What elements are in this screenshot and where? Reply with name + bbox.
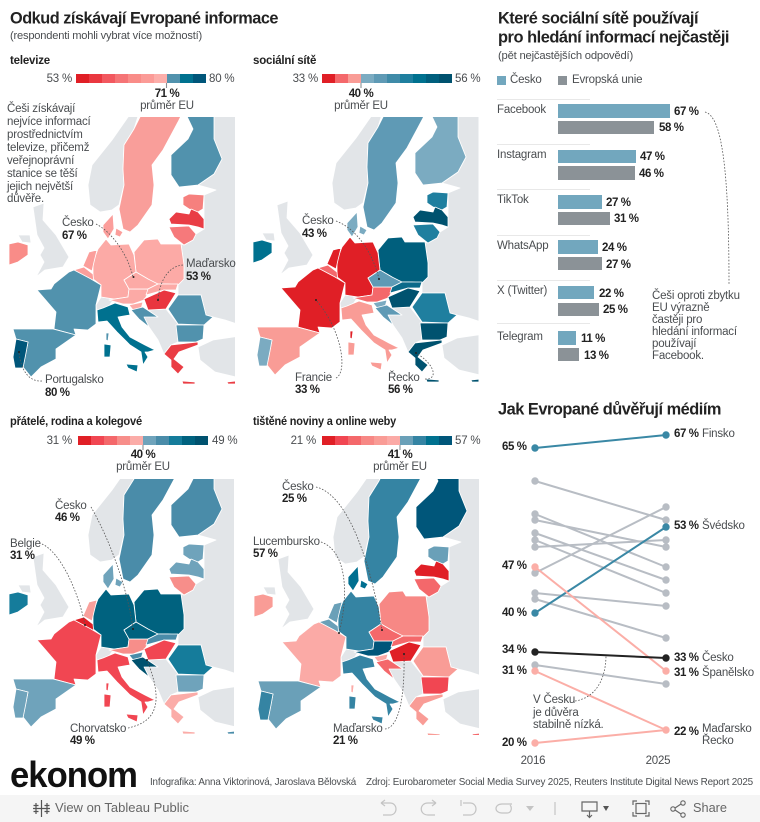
slope line: Maďarsko: 31 % xyxy=(502,665,527,677)
callout: Lucembursko print: 57 % xyxy=(253,548,278,560)
legend: bars: Česko xyxy=(510,73,542,86)
text block: TV note: jejich největší xyxy=(6,181,74,193)
callout: stable trust note: stabilně nízká. xyxy=(533,719,604,731)
callout: Česko friends: 46 % xyxy=(55,512,80,524)
callout: Facebook note xyxy=(652,112,740,362)
bars: Telegram: 13 % xyxy=(584,350,609,362)
callout: Maďarsko TV: 53 % xyxy=(186,271,211,283)
legend: television scale: průměr EU xyxy=(140,100,194,112)
credits: authors: Infografika: Anna Viktorinová, Jaroslava Bělovská xyxy=(150,776,356,788)
legend: social scale: 40 % xyxy=(349,88,373,100)
panel: social networks bar chart xyxy=(497,8,740,362)
slope line: Maďarsko xyxy=(502,665,752,738)
axis labels: years: 2016 xyxy=(521,755,545,767)
callout: Portugalsko TV: 80 % xyxy=(45,387,70,399)
callout: Řecko social: Řecko xyxy=(388,371,420,384)
heading: which social networks: pro hledání informací nejčastěji xyxy=(498,27,729,46)
callout: Česko TV xyxy=(62,216,134,278)
slope line: Finsko: 67 % xyxy=(674,428,699,440)
callout: Česko print xyxy=(282,480,383,631)
callout: Facebook note: EU výrazně xyxy=(652,302,709,314)
callout: Česko TV: Česko xyxy=(62,216,94,229)
callout: Česko social xyxy=(302,214,380,280)
bars: Facebook: Facebook xyxy=(497,104,546,116)
slope line: Španělsko: 47 % xyxy=(502,560,527,572)
text block: TV note: nejvíce informací xyxy=(7,116,92,128)
callout: Chorvatsko friends: Chorvatsko xyxy=(70,723,126,735)
slope line: Česko: 34 % xyxy=(502,644,527,656)
legend: friends scale: 40 % xyxy=(131,449,155,461)
legend: bars: Evropská unie xyxy=(572,74,642,86)
icon: share xyxy=(671,801,685,817)
slope line: Maďarsko: 22 % xyxy=(674,726,699,738)
bars: WhatsApp xyxy=(497,240,631,271)
callout: Lucembursko print: Lucembursko xyxy=(253,536,320,548)
panel: trust in media slope chart xyxy=(498,399,754,767)
heading: tištěné noviny a online weby: tištěné noviny a online weby xyxy=(253,416,397,428)
legend: friends scale: 31 % xyxy=(47,435,72,447)
callout: Portugalsko TV xyxy=(18,351,104,399)
logo: ekonom: ekonom xyxy=(10,754,137,795)
callout: Maďarsko TV: Maďarsko xyxy=(186,258,236,270)
bars: WhatsApp: WhatsApp xyxy=(497,240,548,252)
slope line: Řecko: Řecko xyxy=(702,734,734,747)
bars: Telegram: 11 % xyxy=(581,333,605,345)
bars: TikTok: 27 % xyxy=(606,197,631,209)
icon: download xyxy=(582,802,597,818)
callout: Česko social: Česko xyxy=(302,214,334,227)
legend: television scale: 71 % xyxy=(155,88,179,100)
callout: Maďarsko print xyxy=(333,653,405,747)
callout: Chorvatsko friends: 49 % xyxy=(70,735,95,747)
text block: TV note: Češi získávají xyxy=(7,102,76,115)
bars: X (Twitter): X (Twitter) xyxy=(497,285,548,297)
slope line: Maďarsko: Maďarsko xyxy=(702,723,752,735)
callout: Česko social: 43 % xyxy=(302,228,327,240)
legend: friends scale: 49 % xyxy=(212,435,237,447)
slope line: Finsko xyxy=(502,428,735,453)
callout: Řecko social xyxy=(388,352,433,396)
panel: television xyxy=(6,55,240,399)
legend: print scale: 57 % xyxy=(455,435,480,447)
bars: X (Twitter) xyxy=(497,285,628,316)
slope line: Švédsko: 40 % xyxy=(502,607,527,619)
heading: trust in media: Jak Evropané důvěřují médiím xyxy=(498,399,721,418)
slope line: Švédsko: 53 % xyxy=(674,520,699,532)
bars: TikTok: 31 % xyxy=(614,213,639,225)
callout: Portugalsko TV: Portugalsko xyxy=(45,374,104,386)
axis labels: years xyxy=(521,755,670,767)
callout: Chorvatsko friends xyxy=(70,659,156,747)
toolbar: Tableau Public xyxy=(0,795,760,822)
heading: přátelé, rodina a kolegové: přátelé, rodina a kolegové xyxy=(10,416,142,428)
callout: Belgie friends xyxy=(10,538,86,626)
bars: Instagram xyxy=(497,149,665,180)
panel: print newspapers and online sites xyxy=(253,416,485,747)
icons: undo, redo, revert, refresh xyxy=(381,800,555,815)
legend: social scale: 56 % xyxy=(455,73,480,85)
bars: X (Twitter): 25 % xyxy=(603,304,628,316)
slope lines: other countries xyxy=(531,477,670,688)
link: view on Tableau Public: View on Tableau Public xyxy=(55,800,189,815)
slope line: Česko: 33 % xyxy=(674,652,699,664)
slope line: Švédsko: Švédsko xyxy=(702,519,745,532)
bars: Facebook: 58 % xyxy=(659,122,684,134)
heading: sociální sítě: sociální sítě xyxy=(253,55,316,67)
slope line: Finsko: Finsko xyxy=(702,428,735,440)
callout: Česko TV: 67 % xyxy=(62,230,87,242)
bars: Facebook xyxy=(497,104,699,134)
bars: X (Twitter): 22 % xyxy=(599,288,624,300)
slope line: Španělsko: 31 % xyxy=(674,667,699,679)
subtitle: top answers: (pět nejčastějších odpovědí) xyxy=(498,50,633,62)
callout: Maďarsko print: 21 % xyxy=(333,735,358,747)
legend: friends scale xyxy=(47,435,237,473)
bars: TikTok: TikTok xyxy=(497,194,529,206)
callout: Česko friends xyxy=(55,499,134,630)
text block: TV note: veřejnoprávní xyxy=(7,155,75,167)
legend: television scale xyxy=(47,73,234,112)
title: where Europeans get information: Odkud získávají Evropané informace xyxy=(10,8,278,27)
legend: television scale: 80 % xyxy=(209,73,234,85)
callout: Facebook note: častěji pro xyxy=(652,314,702,326)
link: share: Share xyxy=(693,800,727,815)
bars: Facebook: 67 % xyxy=(674,106,699,118)
slope line: Španělsko: Španělsko xyxy=(702,666,754,679)
heading: televize: televize xyxy=(10,55,50,67)
callout: Francie social: Francie xyxy=(295,372,332,384)
callout: Řecko social: 56 % xyxy=(388,384,413,396)
legend: social scale: průměr EU xyxy=(334,100,388,112)
heading: which social networks xyxy=(498,8,729,46)
legend: print scale: průměr EU xyxy=(373,461,427,473)
axis labels: years: 2025 xyxy=(646,755,670,767)
slope line: Finsko: 65 % xyxy=(502,441,527,453)
map: social networks by country xyxy=(253,108,484,382)
callout: Česko print: Česko xyxy=(282,480,314,493)
callout: Francie social: 33 % xyxy=(295,384,320,396)
heading: which social networks: Které sociální sítě používají xyxy=(498,8,700,27)
callout: stable trust note xyxy=(532,655,606,731)
panel: friends, family and colleagues xyxy=(9,416,240,747)
slope line: Švédsko xyxy=(502,519,745,619)
callout: Lucembursko print xyxy=(253,536,345,634)
legend: print scale: 21 % xyxy=(291,435,316,447)
bars: Instagram: Instagram xyxy=(497,149,546,161)
callout: Maďarsko TV xyxy=(157,258,236,301)
callout: stable trust note: je důvěra xyxy=(532,707,579,719)
bars: TikTok xyxy=(497,194,639,225)
callout: Francie social xyxy=(295,299,342,396)
callout: stable trust note: V Česku xyxy=(533,693,575,706)
text block: TV note: prostřednictvím xyxy=(7,129,83,141)
map: television by country xyxy=(9,110,240,384)
subtitle: (respondenti mohli vybrat více možností) xyxy=(10,30,202,42)
map: print and online by country xyxy=(254,462,485,736)
slope line: Česko xyxy=(502,644,734,664)
text block: TV note: důvěře. xyxy=(7,193,44,205)
bars: Telegram xyxy=(497,331,609,362)
callout: Facebook note: Facebook. xyxy=(652,350,704,362)
icon: revert caret xyxy=(526,806,534,811)
text block: TV note: televize, přičemž xyxy=(7,142,90,154)
callout: Česko print: 25 % xyxy=(282,493,307,505)
slope line: Španělsko xyxy=(502,560,754,679)
icon: download caret xyxy=(603,806,609,811)
callout: Belgie friends: 31 % xyxy=(10,550,35,562)
legend: print scale xyxy=(291,435,480,473)
legend: social scale xyxy=(293,73,480,112)
panel: social networks xyxy=(253,55,484,396)
callout: Belgie friends: Belgie xyxy=(10,538,41,550)
legend: social scale: 33 % xyxy=(293,73,318,85)
callout: Facebook note: hledání informací xyxy=(652,326,738,338)
callout: Facebook note: Češi oproti zbytku xyxy=(652,289,740,302)
icon: Tableau logo xyxy=(33,800,50,817)
map: friends by country xyxy=(9,460,240,734)
legend: television scale: 53 % xyxy=(47,73,72,85)
legend: bars xyxy=(497,73,642,86)
callout: Facebook note: používají xyxy=(652,338,697,350)
bars: Instagram: 46 % xyxy=(639,168,664,180)
bars: Telegram: Telegram xyxy=(497,331,543,343)
slope line: Řecko xyxy=(502,730,734,749)
bars: WhatsApp: 24 % xyxy=(602,242,627,254)
legend: friends scale: průměr EU xyxy=(116,461,170,473)
legend: print scale: 41 % xyxy=(388,449,412,461)
icon: fullscreen xyxy=(633,801,649,816)
bars: WhatsApp: 27 % xyxy=(606,259,631,271)
callout: Maďarsko print: Maďarsko xyxy=(333,723,383,735)
bars: Instagram: 47 % xyxy=(640,151,665,163)
slope line: Česko: Česko xyxy=(702,651,734,664)
text block: TV note: stanice se těší xyxy=(7,168,79,180)
callout: Česko friends: Česko xyxy=(55,499,87,512)
slope line: Řecko: 20 % xyxy=(502,737,527,749)
